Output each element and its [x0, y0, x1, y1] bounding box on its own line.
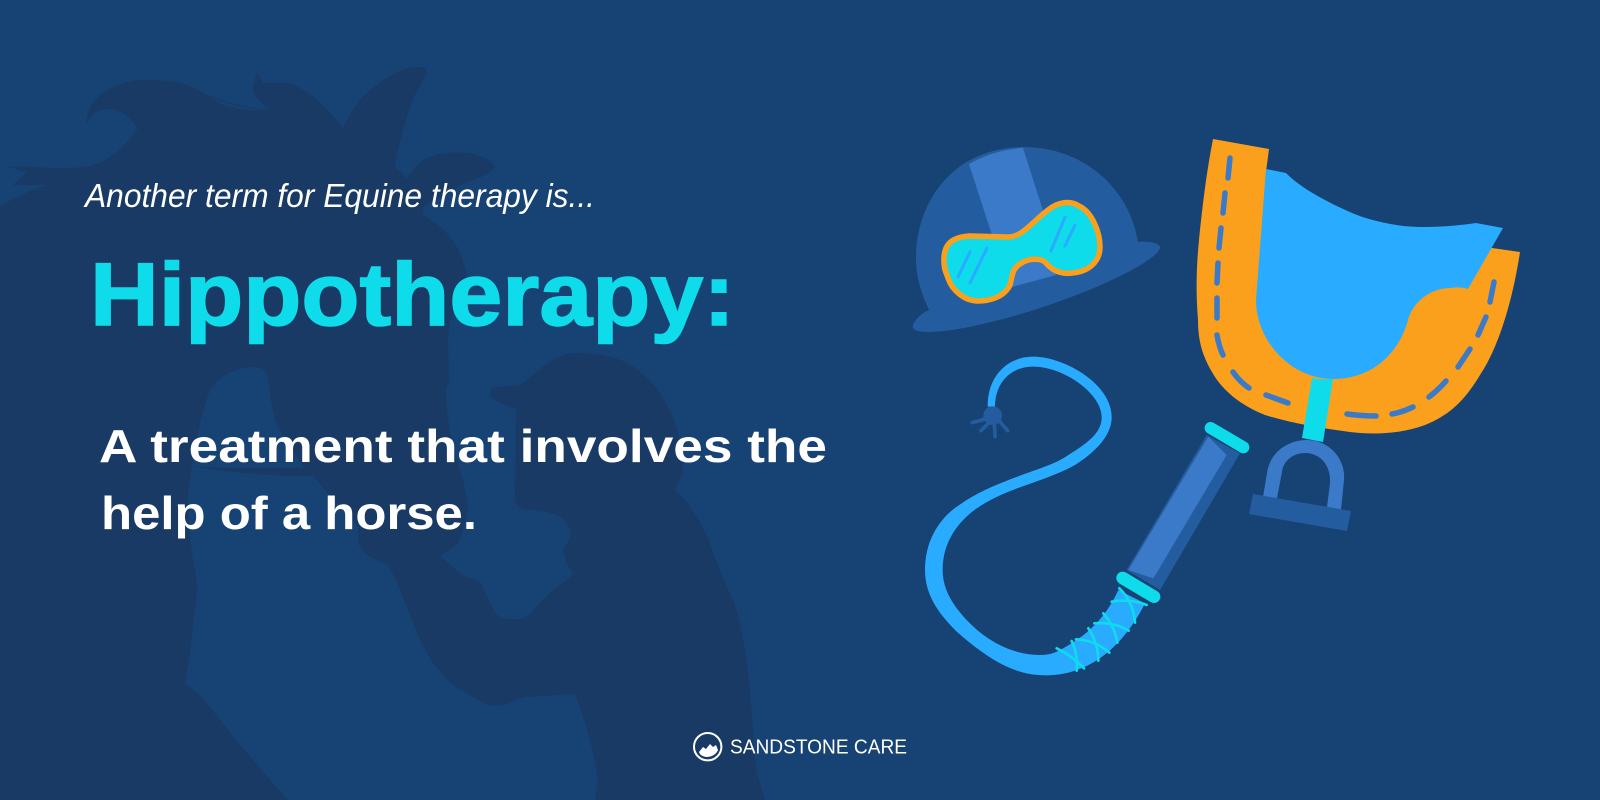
whip handle	[1123, 428, 1243, 597]
stirrup	[1249, 440, 1351, 531]
description text: A treatment that involves the	[99, 420, 827, 472]
saddle stitching	[1217, 158, 1494, 416]
silhouette: horse and rider	[0, 67, 765, 800]
subtitle: Another term for Equine therapy is...	[83, 178, 595, 215]
logo mark	[694, 733, 721, 760]
icon: riding helmet	[913, 147, 1160, 332]
whip tip	[972, 406, 1008, 437]
whip lacing	[1057, 588, 1147, 671]
logo wordmark: SANDSTONE CARE	[730, 736, 907, 758]
saddle strap	[1302, 378, 1333, 442]
description text: help of a horse.	[101, 487, 477, 539]
icon: saddle	[1197, 139, 1520, 531]
icon: riding crop whip	[925, 357, 1243, 675]
logo: Sandstone Care	[694, 733, 907, 760]
title: Hippotherapy:	[90, 244, 735, 344]
